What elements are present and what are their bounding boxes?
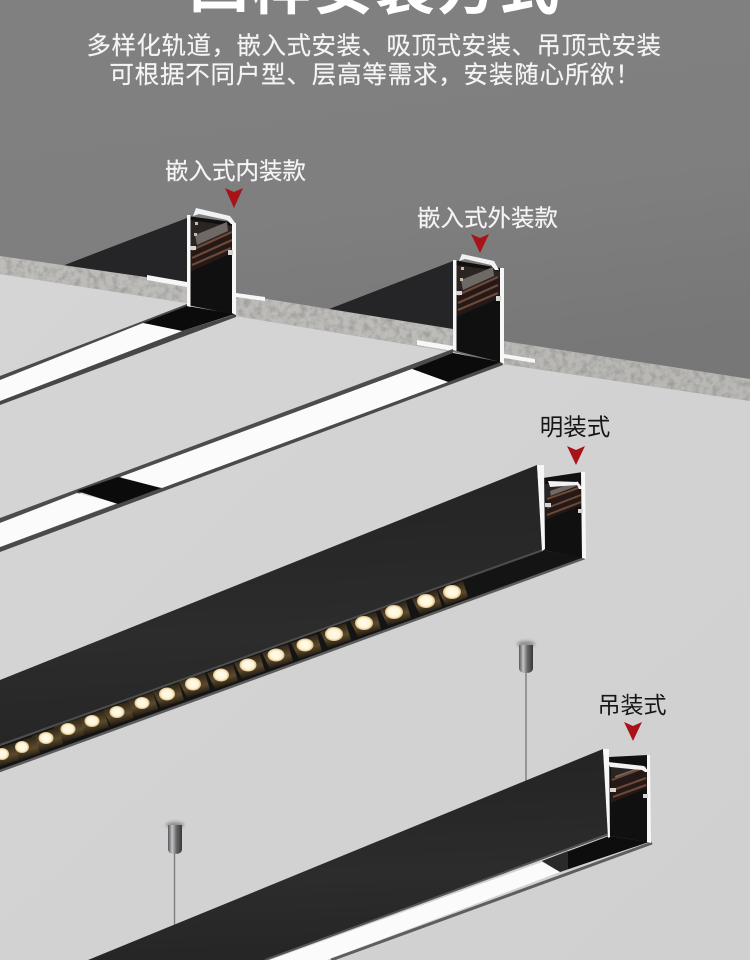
track 4 end profile: [603, 749, 651, 843]
arrow: surface mount: [567, 446, 585, 465]
arrow: embedded inner mount: [225, 188, 243, 208]
concrete ceiling section: [0, 256, 750, 401]
track 4 body face: [88, 749, 609, 960]
pendant wire and cap, left: [166, 822, 184, 926]
recessed track body above ceiling, inner version: [62, 218, 187, 300]
track 2: embedded outer mount: [0, 254, 504, 552]
track 4 dark opening: [542, 836, 649, 872]
track 1 lower edge: [0, 314, 236, 405]
track 2 end profile: [453, 254, 504, 364]
label: pendant mount: 吊装式: [598, 692, 666, 718]
label: embedded inner mount: 嵌入式内装款: [165, 158, 306, 184]
track 1: embedded inner mount: [0, 208, 236, 405]
track 2 light strip, left segment: [0, 493, 117, 547]
label: surface mount: 明装式: [540, 414, 610, 440]
label: embedded outer mount: 嵌入式外装款: [417, 205, 558, 231]
track 3 end profile: [537, 465, 586, 559]
background: lower wall plane: [0, 274, 750, 960]
track 2 dark opening: [412, 353, 501, 382]
track 3 LED beads: [0, 581, 468, 768]
arrow: embedded outer mount: [471, 234, 489, 253]
subtitle text block: [86, 32, 662, 89]
track 3 lower lip: [0, 550, 585, 772]
pendant wire and cap, right: [517, 641, 535, 781]
track 1 dark opening: [143, 306, 235, 331]
track 2 light strip, right segment: [120, 369, 448, 488]
subtitle text block: 可根据不同户型、层高等需求，安装随心所欲！: [109, 61, 641, 89]
track 2 upper edge: [0, 349, 453, 523]
background: ceiling plane: [0, 0, 750, 402]
white flanges: [147, 275, 535, 363]
track 4: pendant mount: [88, 749, 652, 960]
track 3 body face: [0, 465, 543, 746]
subtitle text block: 多样化轨道，嵌入式安装、吸顶式安装、吊顶式安装: [86, 32, 662, 60]
recessed track body above ceiling, outer version: [324, 261, 453, 350]
track 4 light strip: [270, 862, 560, 960]
track 1 upper edge: [0, 304, 187, 381]
track 3: surface mount: [0, 465, 586, 772]
track 1 end profile: [187, 208, 236, 315]
track 1 light strip: [0, 323, 182, 401]
track 2 dark joint: [77, 477, 161, 504]
arrow: pendant mount: [624, 722, 642, 741]
track 2 lower edge: [0, 361, 503, 552]
